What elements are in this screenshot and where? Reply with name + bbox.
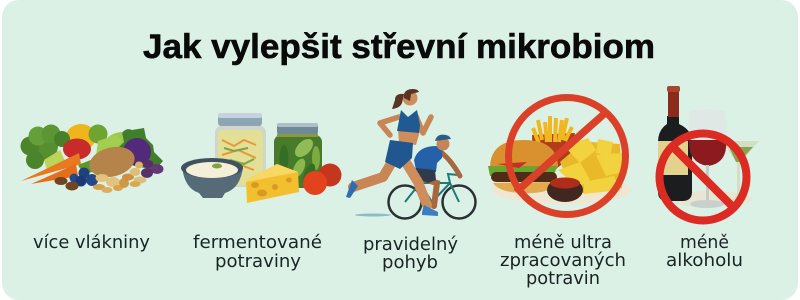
icon: no alcohol <box>658 86 759 220</box>
title: Jak vylepšit střevní mikrobiom <box>143 28 655 66</box>
label: více vlákniny: více vlákniny <box>33 232 150 253</box>
label: méně ultra zpracovaných potravin: zpracovaných <box>500 250 626 271</box>
label: pravidelný pohyb: pohyb <box>382 252 438 273</box>
label: méně alkoholu: méně <box>680 232 729 253</box>
label: méně ultra zpracovaných potravin <box>500 232 626 289</box>
label: fermentované potraviny: fermentované <box>193 232 322 253</box>
icon: fermented foods <box>181 113 342 203</box>
label: méně ultra zpracovaných potravin: méně ultra <box>514 232 612 253</box>
icon: runner and cyclist <box>346 89 476 218</box>
label: méně alkoholu <box>666 232 743 271</box>
icon: vegetables and nuts <box>20 124 164 193</box>
label: fermentované potraviny: potraviny <box>215 251 301 272</box>
icon: no ultra-processed food <box>488 98 632 214</box>
label: pravidelný pohyb <box>363 234 458 273</box>
label: méně ultra zpracovaných potravin: potravin <box>526 268 600 289</box>
label: pravidelný pohyb: pravidelný <box>363 234 458 255</box>
label: fermentované potraviny <box>193 232 322 272</box>
label: méně alkoholu: alkoholu <box>666 250 743 271</box>
